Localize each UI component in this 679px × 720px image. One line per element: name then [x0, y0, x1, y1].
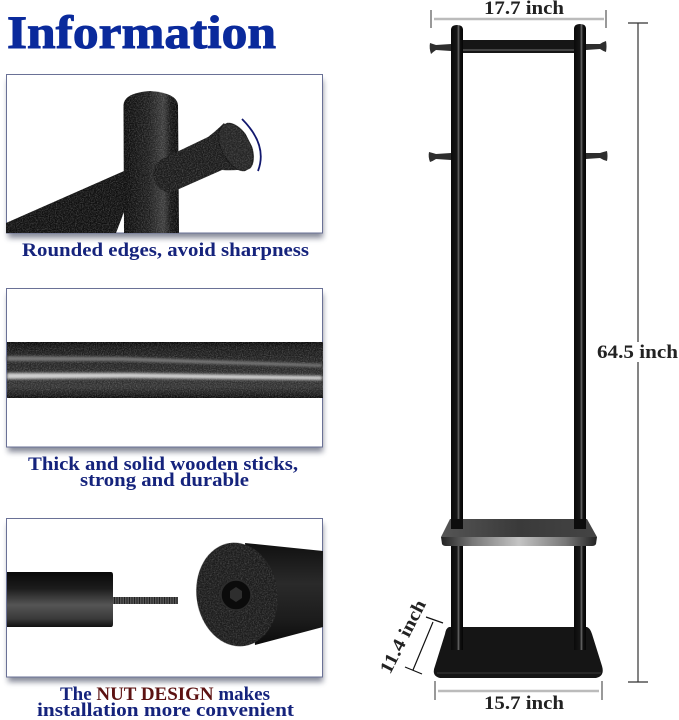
top right hook: [586, 41, 606, 52]
dimension: top width: [431, 0, 606, 28]
nut: [221, 580, 251, 610]
top left hook: [430, 43, 451, 54]
stick body end: [245, 543, 323, 645]
curve marker: [242, 119, 261, 171]
wooden stick: [7, 342, 323, 398]
crossbar: [6, 171, 124, 233]
dimension: base depth: [377, 596, 443, 677]
caption: thick stick: [28, 455, 298, 491]
caption: rounded edges: Rounded edges, avoid sharpness: [22, 241, 309, 261]
title: Information: [7, 7, 276, 59]
dimension: base depth: 11.4 inch: [377, 596, 431, 677]
top rail: [463, 40, 574, 53]
coat rack product: [429, 24, 608, 678]
base: [434, 627, 603, 678]
stick with screw: [7, 572, 178, 627]
middle left hook: [429, 152, 451, 162]
panel: rounded edges: [6, 74, 323, 238]
panel: nut design: [6, 518, 323, 682]
caption: thick stick: Thick and solid wooden sticks,: [28, 455, 298, 475]
caption: nut design: The NUT DESIGN makes: [60, 685, 270, 705]
middle right hook: [586, 151, 608, 161]
dimension: bottom width: [435, 681, 602, 714]
upright post: [124, 91, 179, 233]
hook peg: [153, 123, 250, 193]
hook head: [212, 118, 260, 176]
dimension: bottom width: 15.7 inch: [484, 694, 565, 714]
end face: [190, 537, 284, 652]
caption: nut design: [37, 685, 295, 720]
dimension: height: [597, 23, 679, 682]
dimension: height: 64.5 inch: [597, 343, 679, 363]
left post: [451, 25, 463, 650]
panel: thick stick: [6, 288, 323, 452]
caption: thick stick: strong and durable: [80, 471, 249, 491]
shelf: [441, 519, 597, 546]
right post: [574, 24, 586, 650]
